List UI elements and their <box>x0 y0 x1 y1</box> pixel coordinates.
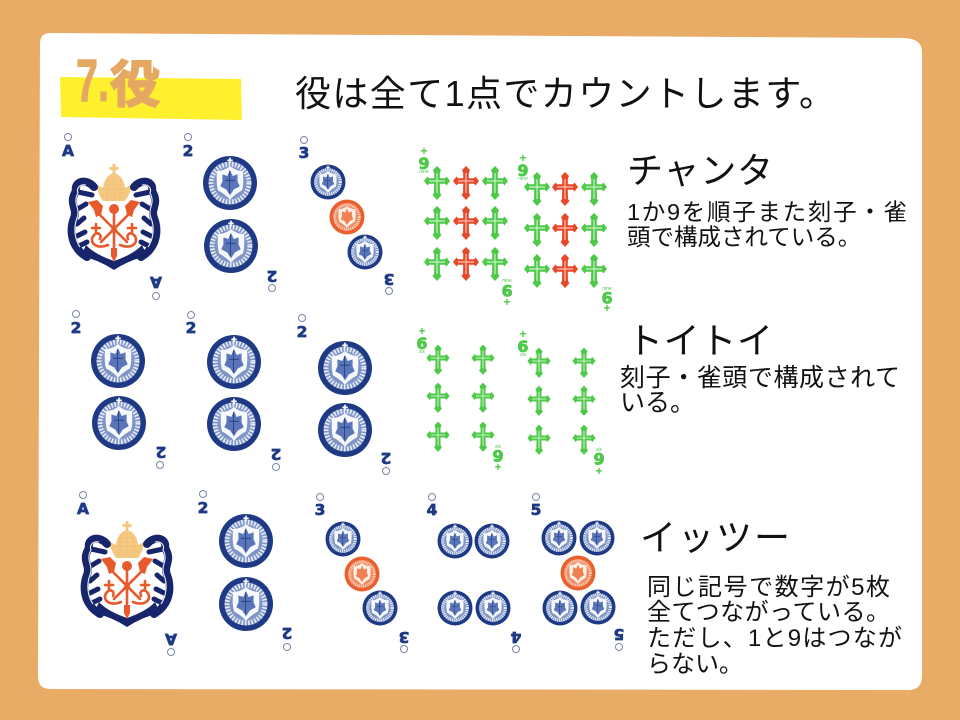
heading: 7.役: 7. <box>76 47 109 114</box>
card row 3: 2: 2 <box>282 624 292 642</box>
card row 2: 2 first: 2 <box>71 319 81 337</box>
cross card row 2: 6 right: six <box>520 352 527 358</box>
cross card row 1: 9 right: + <box>603 301 611 315</box>
cross card row 2: 6 left: six <box>419 349 426 355</box>
cross card row 2: 6 left: 6 <box>492 446 504 465</box>
description: チャンタ: 1か9を順子また刻子・雀 <box>627 199 907 225</box>
description: チャンタ: 頭で構成されている。 <box>627 224 861 250</box>
card row 3: 2 <box>198 490 292 650</box>
card row 3: A: A <box>77 500 89 518</box>
cross card row 2: 6 right <box>517 327 605 478</box>
card row 2: 2 first: 2 <box>156 443 166 461</box>
heading: 7.役 <box>60 47 242 120</box>
card row 1: A: A <box>62 142 74 160</box>
description: イッツー: 同じ記号で数字が5枚 <box>647 574 890 601</box>
title text: 役は全て1点でカウントします。 <box>295 73 835 114</box>
heading: トイトイ: トイトイ <box>627 320 773 361</box>
card row 2: 2 first <box>71 310 166 468</box>
heading: 7.役: 役 <box>110 57 160 113</box>
cross card row 2: 6 right: six <box>596 447 603 453</box>
description: チャンタ <box>627 199 907 250</box>
card row 1: 2: 2 <box>183 142 193 160</box>
card row 2: 2 second: 2 <box>186 319 196 337</box>
cross card row 2: 6 right: 6 <box>517 337 529 356</box>
card row 3: 5: 5 <box>614 625 624 643</box>
cross card row 1: 9 left: nine <box>502 278 512 284</box>
card row 3: 2: 2 <box>198 499 208 517</box>
card row 1: A <box>62 134 162 300</box>
cross card row 1: 9 left: + <box>420 144 428 158</box>
description: イッツー: 全てつながっている。 <box>647 599 890 626</box>
cross card row 2: 6 right: + <box>519 327 527 341</box>
cross card row 2: 6 left: + <box>494 460 502 474</box>
card row 3: 4 <box>427 494 521 652</box>
cross card row 1: 9 right: nine <box>518 176 528 182</box>
cross card row 1: 9 left <box>418 144 513 309</box>
cross card row 1: 9 left: nine <box>419 169 429 175</box>
card row 1: 3 <box>299 136 394 294</box>
card row 3: 4: 4 <box>510 628 521 646</box>
card row 1: 3: 3 <box>384 270 394 288</box>
cross card row 2: 6 left: 6 <box>416 334 428 353</box>
card row 3: 3: 3 <box>399 628 409 646</box>
description: トイトイ <box>620 364 900 417</box>
card row 2: 2 second <box>186 312 281 470</box>
cross card row 2: 6 left: six <box>495 444 502 450</box>
heading: チャンタ: チャンタ <box>627 150 773 191</box>
card row 3: 3: 3 <box>315 501 325 519</box>
cross card row 1: 9 right: 9 <box>517 161 529 180</box>
cross card row 1: 9 right: 9 <box>601 288 613 307</box>
card row 1: 2 <box>183 134 277 292</box>
heading: イッツー: イッツー <box>640 517 790 558</box>
description: イッツー: ただし、1と9はつなが <box>647 625 902 652</box>
description: イッツー: らない。 <box>647 651 743 678</box>
cross card row 2: 6 left: + <box>418 324 426 338</box>
card row 2: 2 third <box>297 314 391 474</box>
cross card row 1: 9 right <box>517 151 613 315</box>
card row 1: 2: 2 <box>267 267 277 285</box>
card row 3: A <box>77 492 177 656</box>
card row 3: 4: 4 <box>427 501 438 519</box>
description: イッツー <box>647 574 902 678</box>
card row 1: A: A <box>150 273 162 291</box>
card row 2: 2 third: 2 <box>297 323 307 341</box>
card row 3: 5: 5 <box>531 501 541 519</box>
card row 3: 5 <box>531 494 624 650</box>
cross card row 2: 6 right: 6 <box>593 449 605 468</box>
cross card row 1: 9 left: + <box>503 295 511 309</box>
card row 3: 3 <box>315 494 409 652</box>
description: トイトイ: 刻子・雀頭で構成されて <box>620 364 900 392</box>
card row 2: 2 third: 2 <box>381 449 391 467</box>
cross card row 1: 9 right: nine <box>602 286 612 292</box>
description: トイトイ: いる。 <box>620 389 695 417</box>
card row 1: 3: 3 <box>299 144 309 162</box>
cross card row 1: 9 left: 9 <box>418 154 430 173</box>
cross card row 1: 9 right: + <box>519 151 527 165</box>
cross card row 2: 6 right: + <box>595 464 603 478</box>
cross card row 2: 6 left <box>416 324 504 474</box>
cross card row 1: 9 left: 9 <box>501 281 513 300</box>
card row 2: 2 second: 2 <box>271 445 281 463</box>
card row 3: A: A <box>165 630 177 648</box>
